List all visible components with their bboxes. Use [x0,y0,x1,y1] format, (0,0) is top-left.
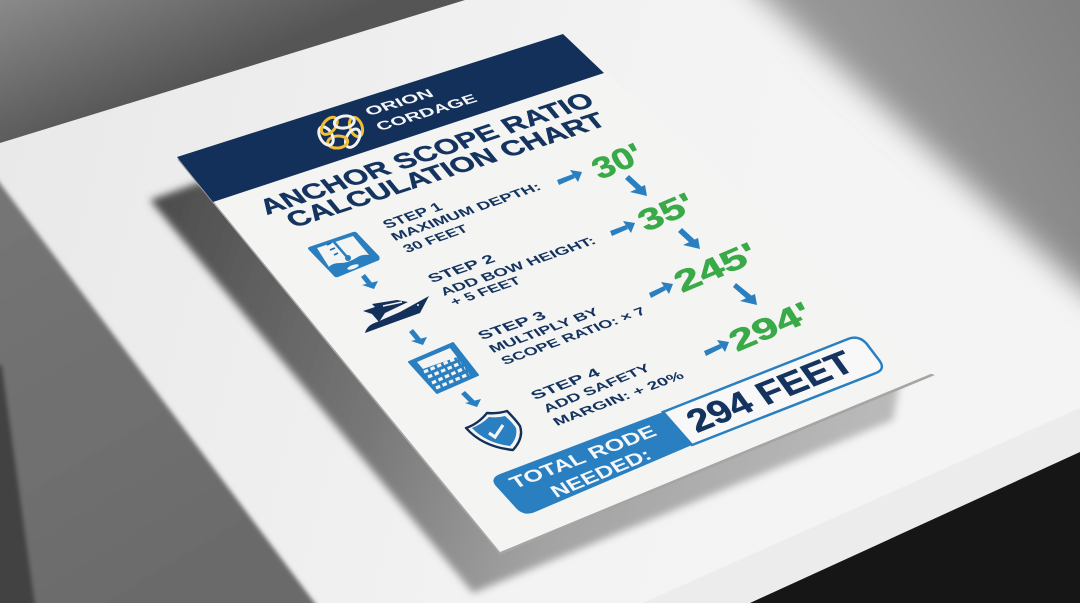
step 2 text: + 5 FEET [447,274,525,308]
total label: TOTAL RODE [506,422,661,493]
panel: paper sheet [177,34,935,555]
icon: boat [363,296,429,333]
total rode result box [493,338,882,514]
step 1 text: STEP 1 [380,200,446,232]
step 2 text: ADD BOW HEIGHT: [437,234,599,298]
step 4 text [528,361,687,428]
step 1 text: MAXIMUM DEPTH: [388,180,544,243]
step 4 text: STEP 4 [528,366,604,403]
step 1 text: 30 FEET [400,222,472,255]
floor at left [0,170,320,603]
title: CALCULATION CHART [281,109,612,232]
table front edge [643,408,1080,603]
paper shadow [150,182,900,593]
step 1 text [380,180,544,255]
arrows: between icons [361,274,481,407]
step 3 text: SCOPE RATIO: × 7 [498,305,649,367]
dark floor at lower right [750,452,1080,603]
total label: NEEDED: [547,445,656,502]
brand name: ORION [362,87,437,119]
icon: Orion Cordage knot logo [316,114,365,150]
result values: 245' [667,236,764,299]
total value: 294 FEET [679,344,862,439]
step 3 text [475,305,649,367]
step 4 text: MARGIN: + 20% [550,369,687,428]
arrows: value to next value [625,175,757,305]
icon: calculator [409,343,478,393]
step 2 text [425,234,599,308]
brand name: CORDAGE [373,92,481,134]
result values: 294' [722,295,818,358]
result values: 30' [585,137,650,186]
result values [585,137,818,358]
step 3 text: MULTIPLY BY [486,305,602,355]
icon: depth gauge [308,232,380,277]
step 4 text: ADD SAFETY [540,361,653,415]
arrows: step to value [557,170,729,356]
step 3 text: STEP 3 [475,309,550,343]
step 2 text: STEP 2 [425,252,499,286]
brand name [362,87,481,134]
title: ANCHOR SCOPE RATIO [254,89,600,219]
icon: shield [466,411,521,450]
background wall left [0,0,465,143]
result values: 35' [631,186,701,238]
header band [177,34,604,202]
background wall right [700,0,1080,350]
